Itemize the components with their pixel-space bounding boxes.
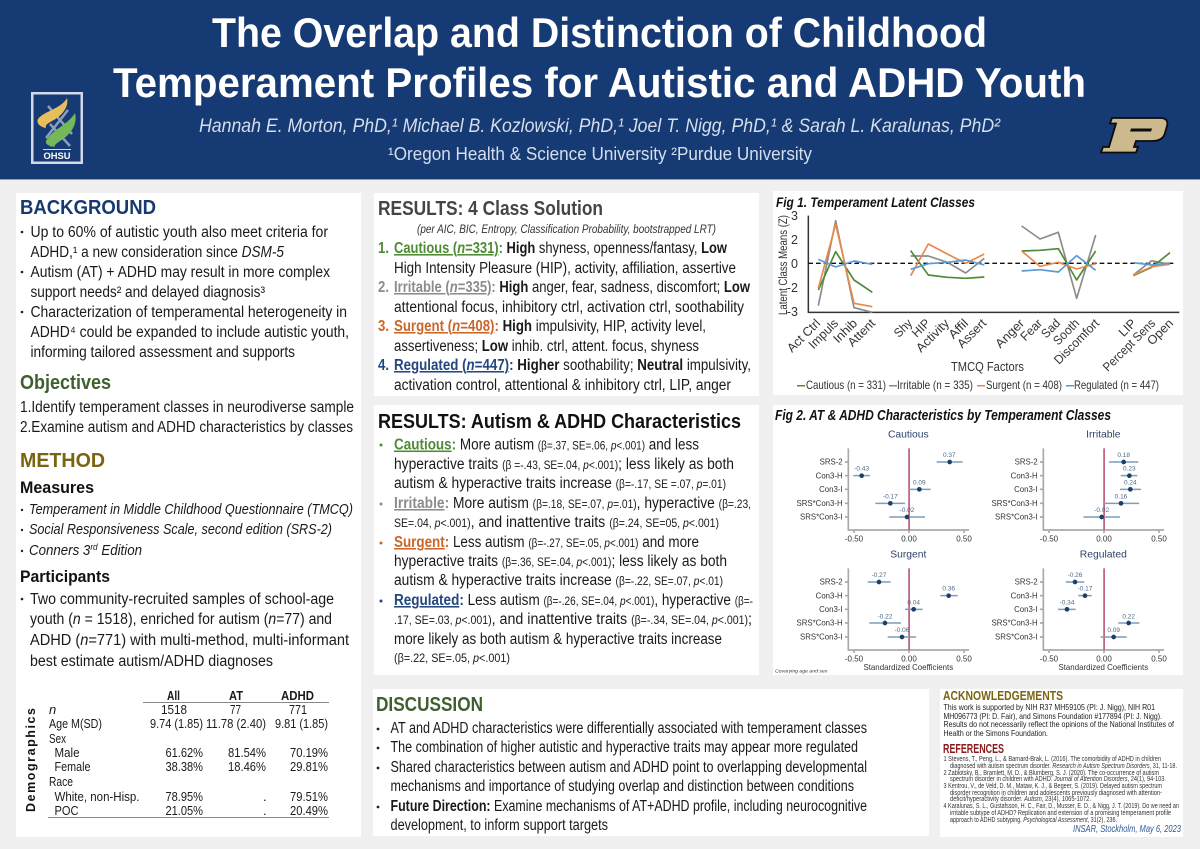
panel: acknowledgements and references [940, 689, 1183, 837]
forest plot: surgent: Standardized Coefficients [863, 663, 953, 672]
forest plot: surgent: -0.06 [895, 627, 910, 634]
x axis category labels: Sooth [1050, 316, 1082, 348]
subheading: participants: Participants [20, 567, 110, 586]
references list: approach to ADHD subtyping. Psychological Assessment, 31(2), 236. [950, 817, 1117, 824]
table: demographics: 70.19% [290, 745, 328, 760]
panel: discussion [373, 689, 929, 836]
class 3 surgent: 3. [378, 318, 389, 335]
forest plots [775, 429, 1167, 674]
forest plot: irritable: -0.50 [1040, 535, 1059, 544]
discussion bullets: development, to inform support targets [390, 817, 608, 834]
table: demographics: 61.62% [166, 745, 203, 760]
surgent findings: autism & hyperactive traits increase (β=-.22, SE=.07, p<.01) [394, 572, 723, 589]
forest plot: cautious: SRS*Con3-H [797, 499, 843, 508]
x axis title: TMCQ Factors [951, 359, 1024, 374]
forest plot: cautious: 0.50 [956, 535, 972, 544]
forest plot: irritable: 0.16 [1115, 493, 1128, 500]
forest plot: irritable: Irritable [1086, 429, 1121, 440]
heading: objectives: Objectives [20, 372, 111, 394]
forest plot: surgent: -0.22 [878, 613, 893, 620]
references list: deficit/hyperactivity disorder. Autism, 23(4), 1065-1072. [950, 796, 1091, 803]
class 1 cautious: 1. [378, 240, 389, 257]
class 1 cautious: High Intensity Pleasure (HIP), activity, affiliation, assertive [394, 260, 736, 277]
x axis category labels: HIP [909, 316, 933, 340]
table: demographics: 81.54% [228, 745, 266, 760]
background bullets: ADHD,¹ a new consideration since DSM-5 [30, 244, 284, 261]
heading: discussion: DISCUSSION [376, 694, 483, 716]
forest plot: irritable: SRS*Con3-I [995, 513, 1038, 522]
background bullets: Characterization of temperamental heterogeneity in [30, 304, 347, 321]
forest plot: irritable: Con3-H [1011, 471, 1038, 480]
forest plot: regulated: Con3-I [1014, 605, 1038, 614]
class 4 regulated: 4. [378, 357, 389, 374]
objectives list: 1.Identify temperament classes in neurodiverse sample [20, 399, 354, 416]
forest plot: cautious: 0.09 [913, 479, 926, 486]
participants text: best estimate autism/ADHD diagnoses [30, 653, 273, 670]
x axis category labels: Impuls [806, 316, 841, 352]
participants text: ADHD (n=771) with multi-method, multi-informant [30, 632, 350, 649]
authors: Hannah E. Morton, PhD,¹ Michael B. Kozlowski, PhD,¹ Joel T. Nigg, PhD,¹ & Sarah L. Karalunas, PhD² [199, 116, 1001, 137]
heading: background: BACKGROUND [20, 197, 156, 219]
forest plot: surgent [797, 549, 972, 672]
table: demographics: 79.51% [290, 789, 328, 804]
measures list: Conners 3 [29, 543, 96, 559]
y axis tick labels: 2 [791, 233, 798, 247]
forest plot: regulated: SRS*Con3-I [995, 633, 1038, 642]
table: demographics: Age M(SD) [49, 716, 102, 731]
forest plot: cautious: -0.02 [900, 507, 915, 514]
class 4 regulated: activation control, attentional & inhibitory ctrl, LIP, anger [394, 377, 731, 394]
forest plot: surgent: Surgent [890, 549, 927, 560]
surgent findings: Surgent: Less autism (β=-.27, SE=.05, p<.001) and more [394, 534, 699, 551]
table: demographics: 771 [289, 702, 307, 717]
background bullets: informing tailored assessment and supports [30, 344, 295, 361]
x axis category labels: Inhib [830, 316, 860, 346]
y axis title: Latent Class Means (Z) [778, 215, 790, 315]
forest plot: surgent: SRS-2 [820, 578, 843, 587]
figure 1 title: Fig 1. Temperament Latent Classes [776, 194, 975, 210]
x axis category labels: Sad [1038, 316, 1063, 341]
table: demographics: 9.74 (1.85) [150, 716, 203, 731]
forest plot: irritable: 0.24 [1124, 479, 1137, 486]
participants text: youth (n = 1518), enriched for autism (n=77) and [30, 611, 332, 628]
objectives list [20, 399, 354, 436]
x axis category labels: Act Ctrl [784, 316, 823, 355]
legend: Surgent (n = 408) [986, 378, 1062, 392]
class 3 surgent: Surgent (n=408): High impulsivity, HIP, activity level, [394, 318, 706, 335]
forest plot: surgent: Con3-I [819, 605, 843, 614]
cautious findings: autism & hyperactive traits increase (β=-.17, SE =.07, p=.01) [394, 475, 726, 492]
table: demographics: 9.81 (1.85) [275, 716, 328, 731]
table: demographics: All [167, 688, 180, 703]
x axis category labels: Fear [1018, 316, 1045, 344]
icon: OHSU logo [31, 92, 83, 164]
acknowledgements text: This work is supported by NIH R37 MH59105 (PI: J. Nigg), NIH R01 [944, 702, 1155, 712]
forest plot: irritable: SRS*Con3-H [992, 499, 1038, 508]
forest plot: regulated [992, 549, 1167, 672]
forest plot: cautious [797, 429, 972, 544]
forest plot: surgent: 0.50 [956, 655, 972, 664]
x axis category labels: Activity [913, 316, 953, 355]
table: demographics [24, 688, 329, 818]
table: demographics: AT [229, 688, 243, 703]
y axis tick labels: -2 [787, 281, 798, 295]
table: demographics: 1518 [161, 702, 187, 717]
affiliations: ¹Oregon Health & Science University ²Purdue University [388, 144, 812, 164]
forest plot: regulated: 0.09 [1107, 627, 1120, 634]
x axis category labels: Anger [992, 316, 1027, 351]
forest plot: irritable: 0.00 [1096, 535, 1112, 544]
references list [944, 756, 1179, 824]
class 4 regulated: Regulated (n=447): Higher soothability; Neutral impulsivity, [394, 357, 751, 374]
class 1 cautious [378, 240, 736, 277]
class 3 surgent: assertiveness; Low inhib. ctrl, attent. focus, shyness [394, 338, 699, 355]
x axis category labels: Discomfort [1051, 316, 1102, 367]
figure 2 title: Fig 2. AT & ADHD Characteristics by Temperament Classes [775, 408, 1111, 424]
forest plot: surgent: 0.00 [901, 655, 917, 664]
measures list [21, 502, 353, 559]
class 2 irritable: Irritable (n=335): High anger, fear, sadness, discomfort; Low [394, 279, 751, 296]
class 2 irritable: 2. [378, 279, 389, 296]
header banner [0, 0, 1200, 180]
forest plot: regulated: -0.34 [1060, 599, 1075, 606]
forest plot: cautious: SRS-2 [820, 458, 843, 467]
background bullets: Up to 60% of autistic youth also meet criteria for [30, 224, 328, 241]
x axis category labels: Percept Sens [1100, 316, 1158, 374]
participants text: Two community-recruited samples of school-age [30, 591, 334, 608]
forest plot: surgent: SRS*Con3-I [800, 633, 843, 642]
panel: figure 2 characteristics by classes [773, 405, 1183, 675]
fit criteria note: (per AIC, BIC, Entropy, Classification Probability, bootstrapped LRT) [417, 224, 716, 236]
forest plot: regulated: Regulated [1080, 549, 1127, 560]
heading: references: REFERENCES [943, 742, 1004, 756]
table: demographics: 20.49% [290, 803, 328, 818]
forest plot: irritable: 0.18 [1117, 452, 1130, 459]
forest plot: regulated: SRS*Con3-H [992, 619, 1038, 628]
cautious findings: hyperactive traits (β =-.43, SE=.04, p<.001); less likely as both [394, 456, 734, 473]
title: Temperament Profiles for Autistic and ADHD Youth [113, 59, 1086, 106]
forest plot: surgent: 0.36 [942, 586, 955, 593]
measures list: Social Responsiveness Scale, second edition (SRS-2) [29, 522, 332, 538]
subheading: measures: Measures [20, 478, 94, 497]
class 2 irritable [378, 279, 751, 316]
panel: background, objectives, method, demographics [16, 193, 361, 837]
x axis category labels: Open [1144, 316, 1176, 348]
forest plot: irritable: SRS-2 [1015, 458, 1038, 467]
table: demographics: 38.38% [166, 759, 203, 774]
measures list: Temperament in Middle Childhood Questionnaire (TMCQ) [29, 502, 353, 518]
irritable findings [380, 495, 751, 531]
discussion bullets [377, 720, 867, 834]
heading: results 4 class solution: RESULTS: 4 Class Solution [378, 198, 603, 220]
forest plot: cautious: Cautious [888, 429, 929, 440]
table: demographics: Race [49, 774, 73, 789]
forest plot: regulated: Standardized Coefficients [1058, 663, 1148, 672]
forest plot: surgent: 0.04 [907, 599, 920, 606]
forest plot: cautious: -0.43 [854, 466, 869, 473]
table: demographics: 78.95% [166, 789, 203, 804]
legend: Regulated (n = 447) [1074, 378, 1159, 392]
forest plot: regulated: Con3-H [1011, 591, 1038, 600]
panel: results 4 class solution [374, 193, 759, 396]
table: demographics: Male [54, 745, 80, 760]
class 1 cautious: Cautious (n=331): High shyness, openness/fantasy, Low [394, 240, 728, 257]
y axis tick labels: -3 [787, 305, 798, 319]
y axis tick labels: 3 [791, 209, 798, 223]
table: demographics: . [263, 803, 267, 818]
covariate note: Covarying age and sex [775, 669, 828, 674]
heading: method: METHOD [20, 450, 105, 472]
forest plot: cautious: -0.50 [845, 535, 864, 544]
irritable findings: Irritable: More autism (β=.18, SE=.07, p=.01), hyperactive (β=.23, [394, 495, 751, 512]
table: demographics: 77 [230, 702, 241, 717]
heading: acknowledgements: ACKNOWLEDGEMENTS [943, 689, 1063, 703]
title: The Overlap and Distinction of Childhood [212, 9, 987, 56]
forest plot: surgent: SRS*Con3-H [797, 619, 843, 628]
forest plot: irritable: 0.50 [1151, 535, 1167, 544]
references list: spectrum disorder in children with ADHD. Journal of Attention Disorders, 24(1), 94-103. [950, 776, 1166, 783]
forest plot: cautious: Con3-I [819, 485, 843, 494]
forest plot: regulated: 0.22 [1122, 613, 1135, 620]
table: demographics: . [263, 789, 267, 804]
table: demographics: ADHD [281, 688, 314, 703]
title [113, 9, 1086, 106]
table: demographics: 18.46% [228, 759, 266, 774]
forest plot: irritable: -0.02 [1094, 507, 1109, 514]
regulated findings: (β=.22, SE=.05, p<.001) [394, 653, 510, 665]
measures list: rd [90, 542, 99, 552]
x axis category labels: Assert [954, 316, 989, 351]
forest plot: regulated: SRS-2 [1015, 578, 1038, 587]
cautious findings: Cautious: More autism (β=.37, SE=.06, p<.001) and less [394, 436, 699, 454]
legend [797, 378, 1159, 392]
panel: figure 1 temperament latent classes [773, 191, 1183, 395]
forest plot: regulated: 0.00 [1096, 655, 1112, 664]
surgent findings: hyperactive traits (β=.36, SE=.04, p<.001); less likely as both [394, 553, 727, 570]
class 3 surgent [378, 318, 706, 355]
cautious findings [380, 436, 734, 492]
forest plot: surgent: -0.27 [872, 572, 887, 579]
regulated findings: more likely as both autism & hyperactive traits increase [394, 631, 722, 648]
regulated findings [380, 592, 753, 665]
acknowledgements text [944, 702, 1175, 738]
acknowledgements text: MH096773 (PI: D. Fair), and Simons Foundation #177894 (PI: J. Nigg). [944, 711, 1162, 721]
surgent findings [380, 534, 727, 589]
line chart [808, 216, 1179, 312]
table: demographics: n [49, 702, 56, 717]
icon: OHSU logo: OHSU [44, 151, 70, 161]
forest plot: cautious: -0.17 [883, 493, 898, 500]
table: demographics: 21.05% [166, 803, 203, 818]
legend: Cautious (n = 331) [806, 378, 886, 392]
x axis category labels: Attent [845, 316, 878, 349]
forest plot: irritable: Con3-I [1014, 485, 1038, 494]
measures list: Edition [98, 543, 142, 559]
table: demographics: 29.81% [290, 759, 328, 774]
forest plot: regulated: -0.17 [1078, 586, 1093, 593]
background bullets: Autism (AT) + ADHD may result in more complex [30, 264, 330, 281]
x axis category labels: Shy [891, 316, 916, 340]
discussion bullets: The combination of higher autistic and hyperactive traits may appear more regulated [390, 739, 858, 756]
objectives list: 2.Examine autism and ADHD characteristics by classes [20, 419, 353, 436]
table: demographics: POC [54, 803, 78, 818]
forest plot: cautious: SRS*Con3-I [800, 513, 843, 522]
legend: Irritable (n = 335) [897, 378, 973, 392]
forest plot: surgent: -0.50 [845, 655, 864, 664]
forest plot: irritable [992, 429, 1167, 544]
class 4 regulated [378, 357, 751, 394]
participants text [21, 591, 350, 670]
table: demographics: Demographics [24, 708, 38, 812]
regulated findings: Regulated: Less autism (β=-.26, SE=.04, p<.001), hyperactive (β=- [394, 592, 753, 609]
table: demographics: 11.78 (2.40) [206, 716, 266, 731]
y axis tick labels: 0 [791, 257, 798, 271]
forest plot: regulated: -0.50 [1040, 655, 1059, 664]
forest plot: cautious: 0.00 [901, 535, 917, 544]
references list: diagnosed with autism spectrum disorder. Research in Autism Spectrum Disorders, 31, 11-18. [950, 763, 1177, 770]
forest plot: regulated: 0.50 [1151, 655, 1167, 664]
class 2 irritable: attentional focus, inhibitory ctrl, activation ctrl, soothability [394, 299, 744, 316]
y axis tick labels [787, 209, 798, 319]
panel: results autism and ADHD characteristics [374, 405, 759, 675]
x axis category labels [784, 316, 1176, 374]
discussion bullets: mechanisms and importance of studying overlap and distinction between conditions [390, 778, 854, 795]
irritable findings: SE=.04, p<.001), and inattentive traits (β=.24, SE=05, p<.001) [394, 514, 719, 531]
discussion bullets: Future Direction: Examine mechanisms of AT+ADHD profile, including neurocognitive [390, 798, 867, 815]
x axis category labels: Affil [946, 316, 971, 342]
x axis category labels: LIP [1116, 316, 1139, 340]
table: demographics: Sex [49, 731, 66, 746]
forest plot: cautious: 0.37 [943, 452, 956, 459]
discussion bullets: Shared characteristics between autism and ADHD point to overlapping developmental [390, 759, 867, 776]
forest plot: cautious: Con3-H [816, 471, 843, 480]
forest plot: surgent: Con3-H [816, 591, 843, 600]
background bullets [21, 224, 349, 361]
background bullets: ADHD⁴ could be expanded to include autistic youth, [30, 324, 349, 341]
table: demographics: Female [54, 759, 90, 774]
background bullets: support needs² and delayed diagnosis³ [30, 284, 265, 301]
icon: Purdue P logo [1101, 118, 1167, 152]
heading: results autism and ADHD: RESULTS: Autism & ADHD Characteristics [378, 411, 741, 433]
acknowledgements text: Health or the Simons Foundation. [944, 728, 1048, 738]
table: demographics: White, non-Hisp. [54, 789, 140, 804]
regulated findings: .17, SE=.03, p<.001), and inattentive traits (β=-.34, SE=.04, p<.001); [394, 611, 752, 628]
forest plot: irritable: 0.23 [1123, 466, 1136, 473]
forest plot: regulated: -0.26 [1068, 572, 1083, 579]
discussion bullets: AT and ADHD characteristics were differentially associated with temperament classes [390, 720, 867, 737]
